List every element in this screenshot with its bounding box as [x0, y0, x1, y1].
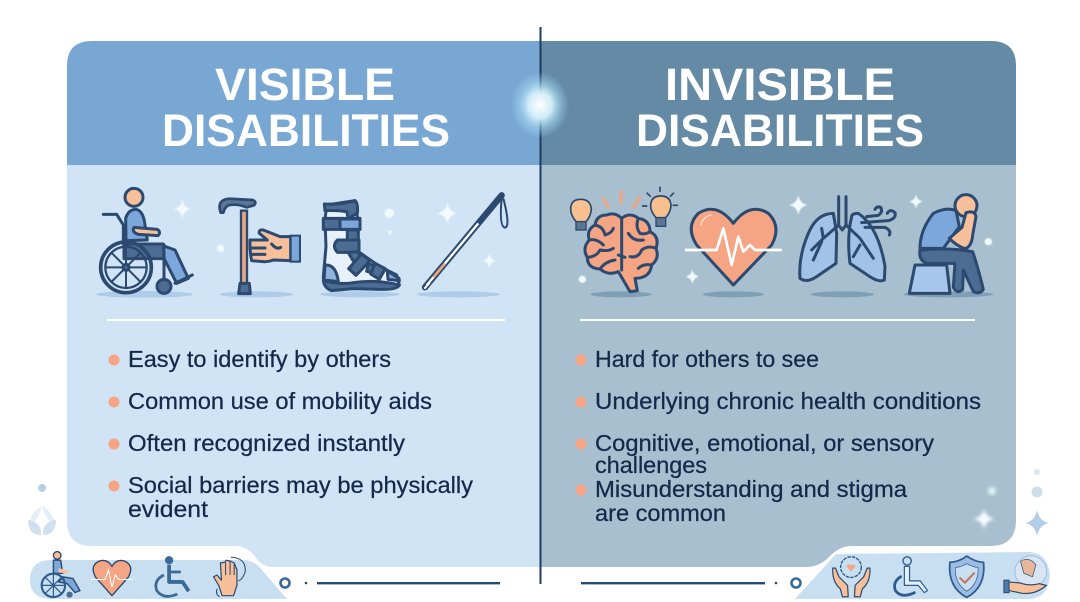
heading: visible disabilities: VISIBLE [215, 59, 395, 110]
bullet: recognized instantly: Often recognized instantly [128, 430, 406, 456]
center glow [511, 72, 569, 138]
divider: invisible [580, 319, 975, 321]
icon row: visible [96, 188, 507, 298]
bullet: stigma [576, 476, 907, 526]
icon: heart with pulse line [685, 209, 782, 297]
footer line [581, 582, 765, 584]
bullet: chronic conditions: Underlying chronic health conditions [595, 388, 981, 414]
bullet: easy to identify: Easy to identify by others [128, 346, 391, 372]
footer line [317, 582, 500, 584]
sparkles [579, 195, 992, 284]
mini icon: wheelchair [42, 552, 80, 598]
decoration: left dots and leaves [28, 484, 56, 535]
icon row: invisible [571, 187, 993, 297]
bullet: mobility aids: Common use of mobility aids [128, 388, 432, 414]
bullet: cognitive challenges: Cognitive, emotional, or sensory [595, 430, 935, 456]
invisible panel body [540, 160, 1016, 567]
heading: visible disabilities [162, 59, 450, 156]
footer icons left [42, 552, 245, 598]
sparkles [173, 199, 495, 268]
icon: walking cane and hand [219, 199, 300, 297]
heading: visible disabilities: DISABILITIES [162, 105, 450, 156]
icon: brain with light bulbs [571, 187, 678, 297]
small dot [305, 582, 307, 584]
heading: invisible disabilities: INVISIBLE [665, 59, 895, 110]
visible panel body [67, 160, 540, 567]
footer strip: left [30, 552, 500, 599]
mini icon: hand holding globe [1004, 556, 1047, 593]
small ring [280, 578, 290, 588]
mini icon: heart [90, 560, 133, 596]
bullet: stigma: are common [595, 500, 726, 526]
bullet: cognitive challenges [576, 430, 935, 478]
icon: person head in hands [903, 195, 993, 297]
bullet: stigma: Misunderstanding and stigma [595, 476, 907, 502]
mini icon: caring hands [833, 557, 870, 597]
bullet: cognitive challenges: challenges [595, 452, 707, 478]
heading: invisible disabilities: DISABILITIES [636, 105, 924, 156]
icon: white cane [417, 195, 507, 297]
decoration: right dots and star [1025, 469, 1049, 536]
divider: visible [107, 319, 505, 321]
mini icon: accessibility symbol [156, 556, 189, 596]
footer strip: right [581, 552, 1050, 599]
heading: invisible disabilities [636, 59, 924, 156]
panel: invisible disabilities [540, 41, 1016, 567]
icon: wheelchair user [96, 188, 193, 298]
strip background [795, 552, 1050, 599]
icon: lungs with wind [800, 197, 895, 297]
footer icons right [833, 556, 1047, 597]
icon: orthopedic boot [320, 201, 400, 297]
bullet: social barriers: Social barriers may be physically [128, 472, 474, 498]
small ring [792, 578, 800, 588]
bullet list: invisible [576, 346, 981, 526]
small dot [775, 582, 777, 584]
bullet list: visible [108, 346, 474, 522]
bullet: hard to see: Hard for others to see [595, 346, 819, 372]
bullet: social barriers: evident [128, 496, 209, 522]
mini icon: raised hand [214, 557, 245, 597]
panel sparkles [973, 487, 996, 530]
mini icon: accessibility outline [895, 557, 927, 595]
visible header band [67, 41, 540, 165]
center divider line [540, 27, 542, 584]
panel: visible disabilities [67, 41, 540, 567]
invisible header band [540, 41, 1016, 165]
mini icon: shield check [950, 556, 984, 597]
bullet: social barriers [108, 472, 474, 522]
strip background [30, 560, 287, 599]
